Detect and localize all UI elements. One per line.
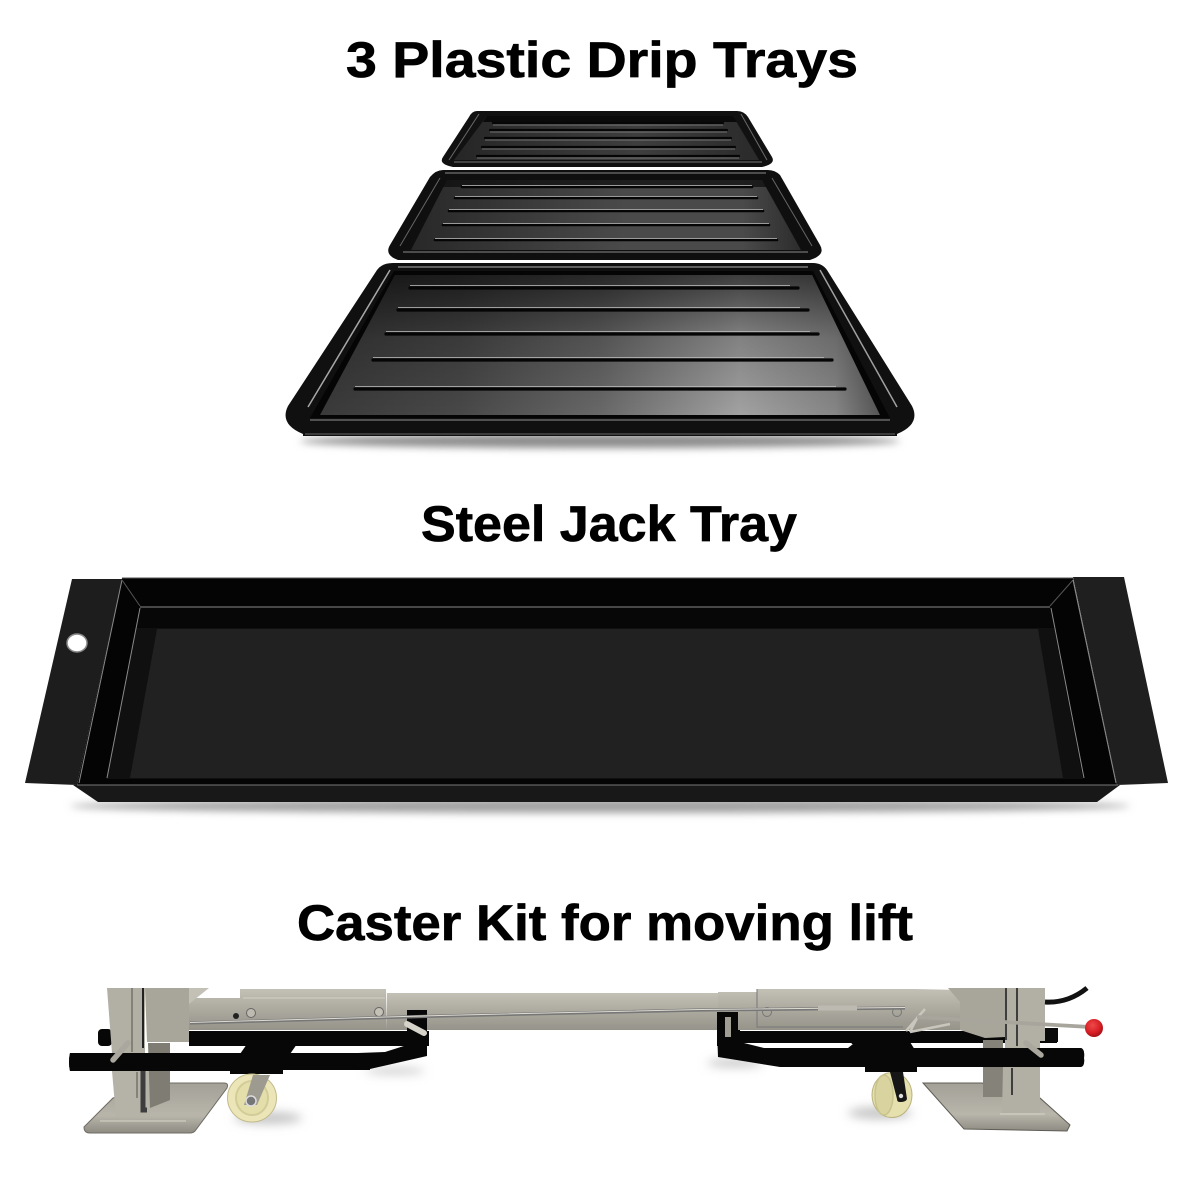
left carriage sleeve [189,989,387,1030]
title: 3 Plastic Drip Trays: 3 Plastic Drip Trays [346,32,858,88]
jack tray shadow [70,799,1130,813]
title: Caster Kit for moving lift: Caster Kit for moving lift [297,895,913,951]
left column [107,988,209,1117]
jack tray right flange [1073,577,1168,785]
right column black block [1045,1028,1058,1042]
tray: shadow under large tray [300,434,900,448]
floor shadows under casters [234,1059,912,1124]
image: caster kit mounted on lift [69,988,1103,1133]
tray: small back tray [442,111,773,167]
left lock pin [113,1043,128,1060]
right column [948,988,1087,1113]
title: Steel Jack Tray: Steel Jack Tray [421,496,797,552]
image: three plastic drip trays [286,111,914,448]
right base plate [923,1083,1070,1131]
left frame bar over column [69,1053,180,1071]
push rod [190,1008,905,1023]
right carriage sleeve [718,989,960,1030]
right frame bar over column [983,1048,1084,1067]
jack tray floor [130,629,1063,778]
left black caster frame [69,1010,429,1074]
jack tray lower outer wall [73,785,1120,802]
tray: large front tray [286,263,914,436]
right white gap in frame [763,1044,853,1048]
jack tray back wall [136,607,1054,628]
left caster wheel [228,1074,276,1122]
handle lever with red ball [906,1009,1103,1037]
image: steel jack tray [25,577,1168,813]
jack tray rim highlights [77,578,1118,785]
right lock pin [1026,1043,1041,1055]
left base plate [84,1083,228,1133]
center right pin [725,1017,731,1037]
tray: medium middle tray [388,170,822,260]
jack tray inner wall strip [107,607,1083,779]
jack tray left flange with hole [25,579,122,785]
center lift beam [387,993,718,1030]
right black caster frame [717,1012,1084,1072]
right caster wheel [872,1072,912,1118]
center left pin [407,1024,424,1033]
jack tray body [77,578,1117,785]
